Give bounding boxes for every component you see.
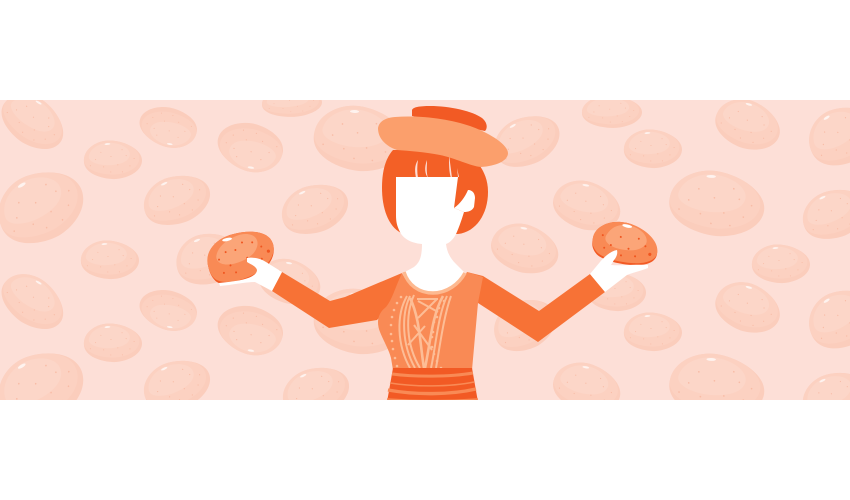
potato	[283, 368, 349, 400]
potato	[140, 107, 197, 148]
potato	[803, 373, 850, 400]
potato	[262, 100, 322, 117]
potato	[0, 354, 84, 400]
potato	[2, 274, 64, 329]
embroidery dots	[390, 296, 445, 369]
potato	[809, 108, 850, 166]
figure	[203, 106, 662, 402]
potato	[84, 140, 142, 179]
hat crown	[412, 106, 487, 131]
potato	[809, 290, 850, 348]
left hand	[219, 258, 282, 291]
neck and face	[396, 177, 465, 293]
ear	[454, 190, 475, 212]
right sleeve	[467, 272, 605, 342]
embroidery	[399, 295, 451, 368]
potato	[144, 176, 210, 225]
potato	[494, 300, 552, 351]
potato	[496, 116, 560, 167]
potato	[260, 258, 320, 304]
left sleeve	[272, 272, 402, 328]
potato	[140, 290, 197, 331]
collar	[404, 272, 465, 293]
belt stripes	[387, 373, 478, 400]
potato	[81, 240, 139, 279]
potato	[84, 324, 142, 362]
potato	[752, 244, 810, 283]
illustration: woman holding two potatoes	[0, 100, 850, 400]
potato pattern	[0, 100, 850, 400]
potato	[314, 288, 388, 354]
potato	[218, 306, 283, 356]
potato	[2, 100, 64, 149]
background band	[0, 100, 850, 400]
right potato	[589, 217, 662, 271]
hat brim	[378, 116, 508, 167]
potato	[669, 170, 764, 236]
potato	[218, 123, 283, 172]
potato	[582, 100, 642, 128]
potato	[715, 100, 780, 150]
belt	[387, 368, 478, 402]
potato	[624, 130, 682, 168]
left potato	[203, 226, 279, 288]
potato	[803, 190, 850, 239]
potato	[553, 362, 620, 400]
potato	[491, 224, 558, 274]
potato	[314, 106, 396, 171]
potato	[144, 360, 210, 400]
potato	[0, 172, 84, 243]
blouse	[378, 272, 483, 370]
hair	[382, 150, 488, 234]
potato	[553, 180, 620, 230]
potato	[282, 184, 348, 234]
right hand	[590, 250, 648, 292]
potato	[592, 275, 646, 311]
hair strands	[415, 155, 459, 178]
potato	[669, 354, 764, 400]
potato	[715, 282, 780, 332]
potato	[176, 234, 225, 284]
potato	[624, 312, 682, 351]
